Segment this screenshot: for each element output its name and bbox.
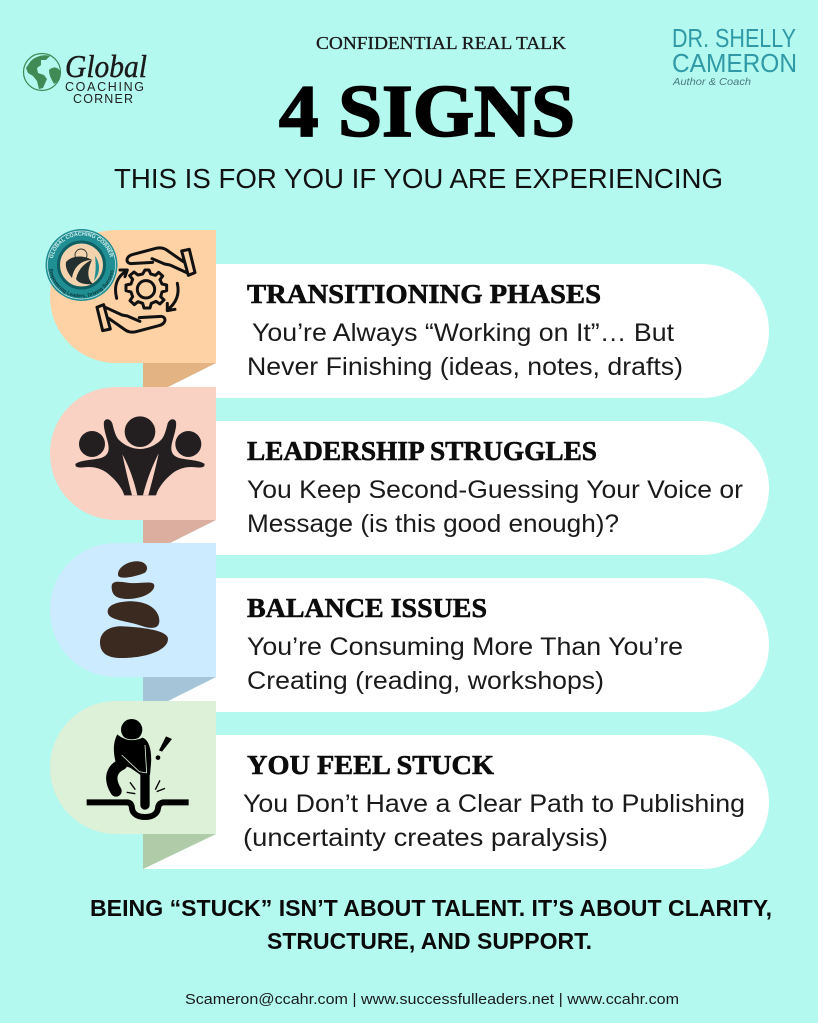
- card body line 1: You Keep Second-Guessing Your Voice or: [247, 476, 743, 504]
- logo wordmark: Global: [65, 48, 147, 84]
- closing statement: [90, 895, 772, 954]
- card body line 2: (uncertainty creates paralysis): [243, 824, 608, 852]
- card heading: YOU FEEL STUCK: [247, 750, 494, 780]
- card heading: BALANCE ISSUES: [247, 593, 487, 623]
- icon tab: [50, 701, 216, 834]
- author role: Author & Coach: [672, 76, 751, 88]
- icon: stacked stones: [100, 561, 168, 658]
- subtitle: THIS IS FOR YOU IF YOU ARE EXPERIENCING: [114, 163, 723, 194]
- card body line 2: Message (is this good enough)?: [247, 510, 619, 538]
- fold: [143, 363, 216, 387]
- fold: [143, 834, 216, 869]
- fold: [143, 520, 216, 544]
- badge: Global Coaching Corner seal: Empowering Leaders, Driving Success: [49, 268, 114, 298]
- panel: balance issues: [50, 543, 769, 712]
- card heading: TRANSITIONING PHASES: [247, 279, 601, 309]
- card body line 2: Never Finishing (ideas, notes, drafts): [247, 353, 683, 381]
- logo subtitle line 2: CORNER: [73, 92, 133, 106]
- panel: transitioning phases: [46, 229, 769, 398]
- footer contact line: Scameron@ccahr.com | www.successfulleaders.net | www.ccahr.com: [185, 991, 679, 1008]
- card background: [216, 735, 769, 869]
- card body line 2: Creating (reading, workshops): [247, 667, 604, 695]
- fold: [143, 677, 216, 701]
- icon tab: [50, 543, 216, 677]
- panel: you feel stuck: [50, 701, 769, 869]
- logo: Dr. Shelly Cameron: [672, 23, 797, 88]
- icon: globe: [24, 54, 60, 90]
- author name line 1: DR. SHELLY: [672, 23, 796, 53]
- logo: Global Coaching Corner: [24, 48, 147, 106]
- logo subtitle line 1: COACHING: [65, 80, 144, 94]
- eyebrow heading: CONFIDENTIAL REAL TALK: [316, 33, 566, 53]
- badge: Global Coaching Corner seal: GLOBAL COACHING CORNER: [50, 232, 114, 258]
- card heading: LEADERSHIP STRUGGLES: [247, 436, 597, 466]
- closing line 2: STRUCTURE, AND SUPPORT.: [267, 928, 592, 954]
- icon tab: [50, 387, 216, 520]
- card background: [216, 264, 769, 398]
- title: 4 SIGNS: [279, 71, 575, 153]
- icon: person stuck in ground: [87, 719, 189, 817]
- card background: [216, 578, 769, 712]
- icon: three people: [75, 416, 205, 495]
- card background: [216, 421, 769, 555]
- card body line 1: You’re Always “Working on It”… But: [252, 319, 674, 347]
- icon: hands and gear: [97, 248, 195, 332]
- panel: leadership struggles: [50, 387, 769, 555]
- card body line 1: You’re Consuming More Than You’re: [247, 633, 683, 661]
- closing line 1: BEING “STUCK” ISN’T ABOUT TALENT. IT’S ABOUT CLARITY,: [90, 895, 772, 921]
- badge: Global Coaching Corner seal: [46, 229, 118, 301]
- card body line 1: You Don’t Have a Clear Path to Publishing: [243, 790, 745, 818]
- icon tab: [50, 230, 216, 363]
- author name line 2: CAMERON: [672, 48, 797, 78]
